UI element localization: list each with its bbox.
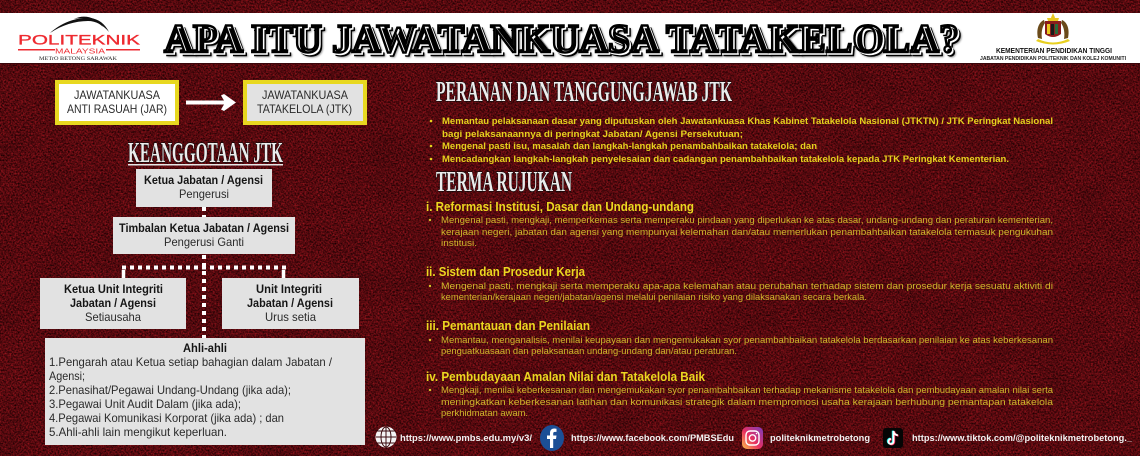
section: Sistem dan Prosedur Kerja: [426, 265, 1053, 302]
box: Ahli-ahli: 5.Ahli-ahli lain mengikut keperluan.: [49, 425, 227, 439]
box: Jawatankuasa Tatakelola: JAWATANKUASA: [262, 88, 348, 102]
section: Reformasi Institusi: Mengenal pasti, mengkaji, memperkemas serta memperaku pindaan yang diperlukan ke atas dasar, undang-undang dan peraturan kementerian,: [441, 215, 1053, 225]
ministry name: [980, 46, 1126, 62]
list: peranan: [430, 116, 1053, 165]
box: Timbalan Ketua: [113, 217, 295, 254]
box: Ahli-ahli: Ahli-ahli: [183, 341, 227, 355]
ministry name: KEMENTERIAN PENDIDIKAN TINGGI: [996, 46, 1112, 55]
box: Unit Integriti: [222, 278, 359, 329]
section: Sistem dan Prosedur Kerja: kementerian/kerajaan negeri/jabatan/agensi melalui penilaian risiko yang dilaksanakan secara berkala.: [441, 292, 867, 302]
footer: tiktok: https://www.tiktok.com/@politeknikmetrobetong._: [912, 433, 1133, 444]
icon: instagram: [742, 427, 763, 449]
box: Jawatankuasa Tatakelola: TATAKELOLA (JTK): [257, 102, 352, 116]
footer: website: https://www.pmbs.edu.my/v3/: [400, 433, 532, 444]
section: Pemantauan dan Penilaian: Memantau, menganalisis, menilai keupayaan dan mengemukakan syor penambahbaikan tatakelola berdasarkan penilaian ke atas keberkesanan: [441, 335, 1053, 345]
heading: Terma Rujukan: TERMA RUJUKAN: [436, 167, 572, 198]
heading: Keanggotaan JTK: KEANGGOTAAN JTK: [128, 138, 283, 169]
box: Ketua Jabatan: Pengerusi: [179, 187, 229, 201]
arrow: JAR to JTK: [186, 94, 236, 111]
header band: [0, 13, 1140, 64]
section: Pembudayaan Amalan Nilai: meningkatkan keberkesanan latihan dan komunikasi strategik dalam mempromosi usaha kerajaan berhubung pemantapan tatakelola: [441, 397, 1054, 407]
logo: Politeknik Malaysia: MALAYSIA: [55, 46, 105, 56]
box: Unit Integriti: Unit Integriti: [256, 282, 322, 296]
footer: instagram: politeknikmetrobetong: [770, 433, 870, 444]
box: Ketua Unit Integriti: Jabatan / Agensi: [70, 296, 156, 310]
section: Pemantauan dan Penilaian: iii. Pemantauan dan Penilaian: [426, 319, 590, 333]
footer: tiktok: [883, 428, 1133, 448]
box: Timbalan Ketua: Timbalan Ketua Jabatan / Agensi: [119, 221, 289, 235]
box: Jawatankuasa Anti Rasuah: ANTI RASUAH (JAR): [67, 102, 167, 116]
ministry name: JABATAN PENDIDIKAN POLITEKNIK DAN KOLEJ KOMUNITI: [980, 56, 1126, 62]
footer: instagram: [742, 427, 870, 449]
section: Pemantauan dan Penilaian: [426, 319, 1053, 356]
box: Ketua Jabatan: [136, 169, 272, 207]
section: Reformasi Institusi: i. Reformasi Institusi, Dasar dan Undang-undang: [426, 200, 694, 214]
section: Reformasi Institusi: [426, 200, 1053, 248]
logo: Politeknik Malaysia: POLITEKNIK: [18, 32, 141, 48]
box: Jawatankuasa Anti Rasuah: [57, 82, 177, 123]
icon: national crest: [1036, 13, 1070, 44]
heading: Peranan dan Tanggungjawab JTK: PERANAN DAN TANGGUNGJAWAB JTK: [436, 77, 732, 108]
list: peranan: Mencadangkan langkah-langkah penyelesaian dan cadangan penambahbaikan tatakelola kepada JTK Peringkat Kementerian.: [442, 154, 1009, 165]
footer: facebook: https://www.facebook.com/PMBSEdu: [571, 433, 734, 444]
box: Ketua Jabatan: Ketua Jabatan / Agensi: [144, 173, 263, 187]
box: Unit Integriti: Jabatan / Agensi: [247, 296, 333, 310]
title: APA ITU JAWATANKUASA TATAKELOLA?: [164, 16, 959, 61]
footer: website: [376, 426, 532, 448]
section: Pembudayaan Amalan Nilai: [426, 370, 1054, 418]
footer: facebook: [540, 425, 734, 451]
box: Jawatankuasa Tatakelola: [245, 82, 365, 123]
section: Reformasi Institusi: kerajaan negeri, jabatan dan agensi yang mempunyai kelemahan dan/atau memerlukan penambahbaikan tatakelola termasuk pengukuhan: [441, 227, 1053, 237]
box: Ketua Unit Integriti: [40, 278, 186, 329]
icon: facebook: [540, 425, 564, 451]
box: Ahli-ahli: Agensi;: [49, 369, 85, 383]
icon: tiktok: [883, 428, 903, 448]
list: peranan: Memantau pelaksanaan dasar yang diputuskan oleh Jawatankuasa Khas Kabinet Tatakelola Nasional (JTKTN) / JTK Peringkat Nasional: [442, 116, 1053, 127]
section: Pembudayaan Amalan Nilai: perkhidmatan awam.: [441, 408, 528, 418]
box: Ahli-ahli: 3.Pegawai Unit Audit Dalam (jika ada);: [49, 397, 241, 411]
box: Ketua Unit Integriti: Setiausaha: [85, 310, 141, 324]
box: Ahli-ahli: 1.Pengarah atau Ketua setiap bahagian dalam Jabatan /: [49, 355, 333, 369]
box: Ahli-ahli: [45, 338, 365, 445]
section: Sistem dan Prosedur Kerja: Mengenal pasti, mengkaji serta memperaku apa-apa kelemahan atau perubahan terhadap sistem dan prosedur kerja sesuatu aktiviti di: [441, 281, 1053, 291]
box: Ketua Unit Integriti: Ketua Unit Integriti: [64, 282, 163, 296]
box: Ahli-ahli: 4.Pegawai Komunikasi Korporat (jika ada) ; dan: [49, 411, 284, 425]
list: peranan: Mengenal pasti isu, masalah dan langkah-langkah penambahbaikan tatakelola; dan: [442, 141, 817, 152]
box: Unit Integriti: Urus setia: [265, 310, 316, 324]
dotted connector lines: [122, 207, 286, 338]
section: Pembudayaan Amalan Nilai: Mengkaji, menilai keberkesanan dan mengemukakan syor penambahbaikan terhadap mekanisme tatakelola dan pembudayaan amalan nilai serta: [441, 385, 1054, 395]
box: Timbalan Ketua: Pengerusi Ganti: [164, 235, 244, 249]
box: Jawatankuasa Anti Rasuah: JAWATANKUASA: [74, 88, 160, 102]
box: Ahli-ahli: 2.Penasihat/Pegawai Undang-Undang (jika ada);: [49, 383, 291, 397]
section: Reformasi Institusi: institusi.: [441, 238, 477, 248]
section: Sistem dan Prosedur Kerja: ii. Sistem dan Prosedur Kerja: [426, 265, 586, 279]
section: Pembudayaan Amalan Nilai: iv. Pembudayaan Amalan Nilai dan Tatakelola Baik: [426, 370, 705, 384]
icon: globe: [376, 426, 396, 448]
list: peranan: bagi pelaksanaannya di peringkat Jabatan/ Agensi Persekutuan;: [442, 129, 743, 140]
logo: Politeknik Malaysia: METrO BETONG SARAWAK: [39, 57, 117, 62]
logo: Politeknik Malaysia: [18, 17, 141, 62]
section: Pemantauan dan Penilaian: penguatkuasaan dan pelaksanaan undang-undang dan/atau peraturan.: [441, 346, 737, 356]
